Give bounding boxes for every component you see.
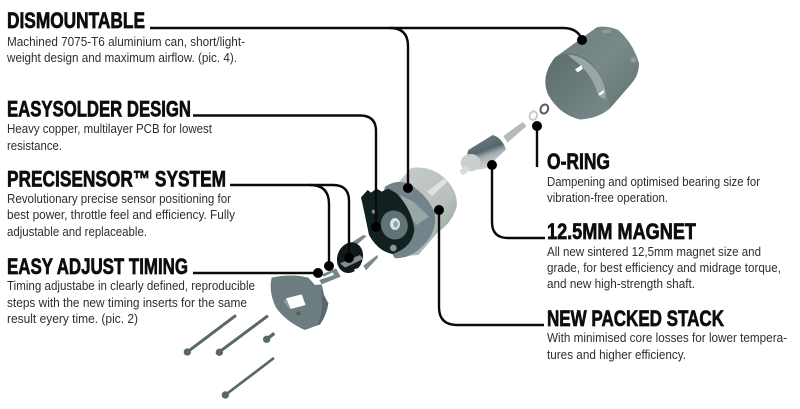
heading: O-RING xyxy=(547,149,610,174)
description: adjustable and replaceable. xyxy=(7,225,147,239)
description: result eyery time. (pic. 2) xyxy=(7,312,138,326)
heading: NEW PACKED STACK xyxy=(547,306,725,331)
o-rings xyxy=(528,103,550,121)
heading: PRECISENSOR™ SYSTEM xyxy=(7,166,226,192)
description xyxy=(7,279,255,326)
description: Machined 7075-T6 aluminium can, short/light- xyxy=(7,35,245,49)
description: resistance. xyxy=(7,139,62,153)
can housing xyxy=(545,27,639,119)
description: All new sintered 12,5mm magnet size and xyxy=(547,245,761,259)
callout: dismountable xyxy=(6,8,587,193)
description: tures and higher efficiency. xyxy=(547,348,686,362)
description: grade, for best efficiency and midrage torque, xyxy=(547,261,781,275)
timing bracket xyxy=(319,268,341,284)
leader line xyxy=(193,116,381,232)
leader line xyxy=(434,205,544,325)
end bell xyxy=(271,275,328,330)
heading: DISMOUNTABLE xyxy=(7,8,145,33)
heading: EASYSOLDER DESIGN xyxy=(7,96,191,122)
description xyxy=(547,245,781,291)
callout: easy adjust timing xyxy=(7,254,323,326)
description xyxy=(547,175,760,205)
description: steps with the new timing inserts for the same xyxy=(7,296,247,310)
description: vibration-free operation. xyxy=(547,191,668,205)
leader line xyxy=(532,121,542,167)
description: Revolutionary precise sensor positioning for xyxy=(7,192,231,206)
leader lines xyxy=(150,28,587,193)
description: weight design and maximum airflow. (pic. 4). xyxy=(6,51,237,65)
description: With minimised core losses for lower tempera- xyxy=(547,331,787,345)
leader lines xyxy=(230,185,354,271)
sensor ring xyxy=(333,235,378,277)
description: Timing adjustabe in clearly defined, reproducible xyxy=(7,279,255,293)
leader line xyxy=(193,268,323,278)
rotor and magnet xyxy=(459,122,527,175)
screws xyxy=(184,315,274,399)
heading: 12.5MM MAGNET xyxy=(547,219,696,244)
illustration: exploded motor xyxy=(184,27,639,399)
description xyxy=(7,192,236,239)
callout: easysolder design xyxy=(7,96,381,232)
new packed stack and front plate xyxy=(361,167,457,258)
description xyxy=(6,35,245,65)
callout: new packed stack xyxy=(434,205,787,362)
callout: 12.5mm magnet xyxy=(487,160,781,291)
description xyxy=(547,331,787,362)
leader line xyxy=(487,160,545,238)
callout: o-ring xyxy=(532,121,760,205)
description: Heavy copper, multilayer PCB for lowest xyxy=(7,122,212,136)
heading: EASY ADJUST TIMING xyxy=(7,254,188,279)
description: and new high-strength shaft. xyxy=(547,277,695,291)
description xyxy=(7,122,212,153)
description: Dampening and optimised bearing size for xyxy=(547,175,760,189)
callout: precisensor system xyxy=(7,166,354,271)
description: best power, throttle feel and efficiency. Fully xyxy=(7,208,236,222)
